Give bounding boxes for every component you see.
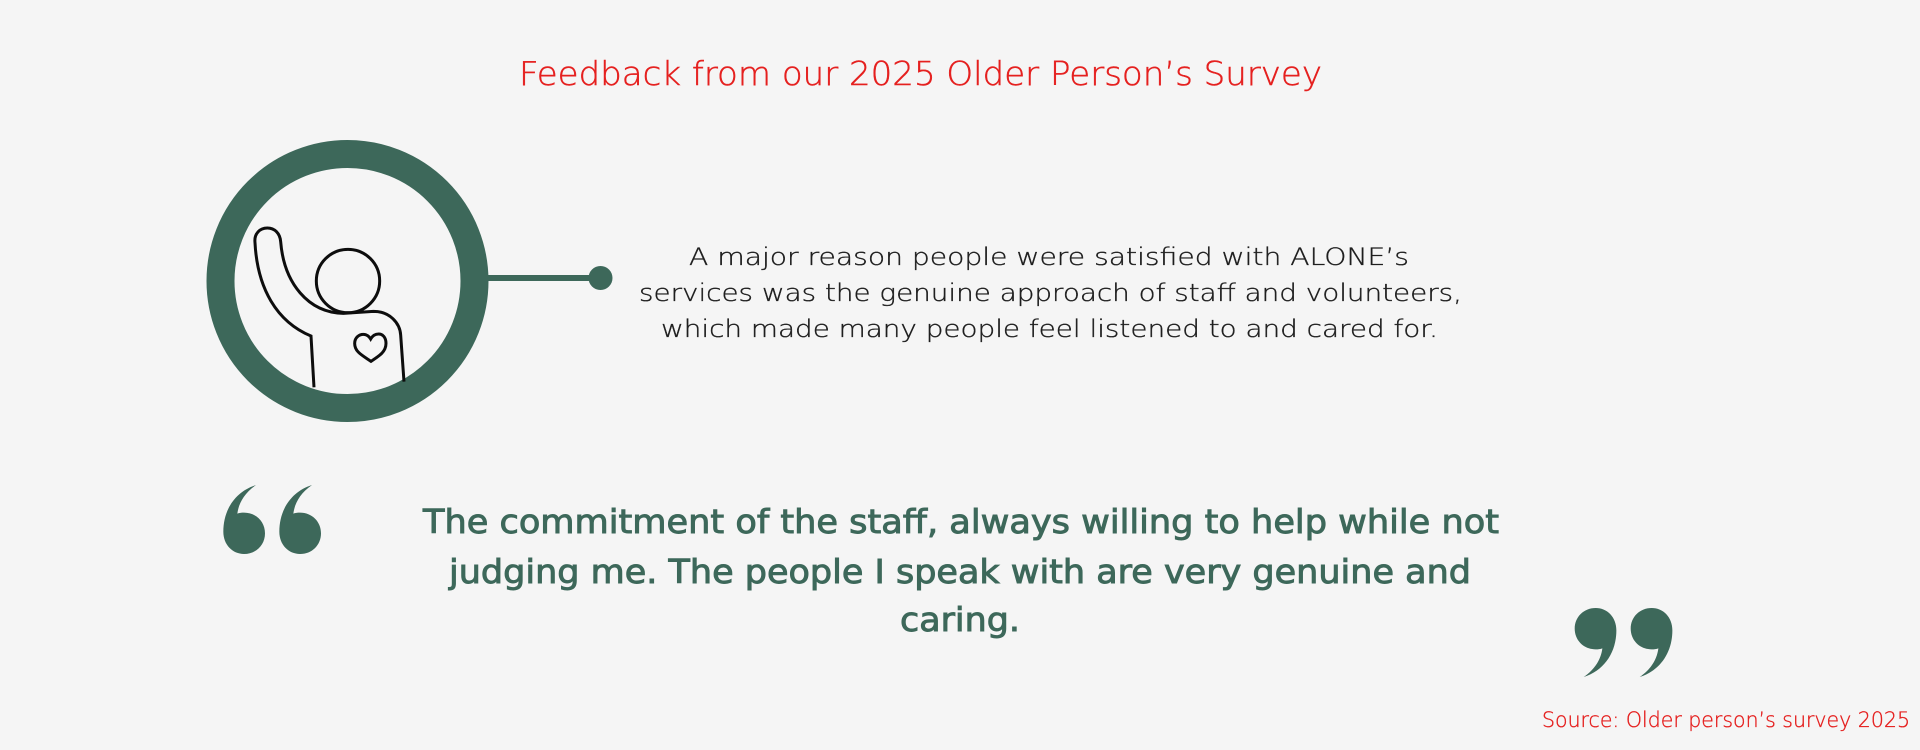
- summary text block: [639, 243, 1462, 343]
- summary text block: services was the genuine approach of staff and volunteers,: [639, 279, 1462, 307]
- connector line with dot: [486, 266, 612, 290]
- title: Feedback from our 2025 Older Person’s Survey: [519, 54, 1322, 93]
- quote text: [422, 503, 1499, 639]
- source note: Source: Older person’s survey 2025: [1542, 708, 1910, 732]
- icon: person raising hand with heart in ring: [220, 154, 474, 408]
- quote text: caring.: [900, 601, 1020, 639]
- icon: opening quotation mark: [223, 485, 321, 554]
- summary text block: A major reason people were satisfied with ALONE’s: [689, 243, 1409, 271]
- icon: closing quotation mark: [1575, 608, 1672, 677]
- summary text block: which made many people feel listened to and cared for.: [661, 315, 1438, 343]
- quote text: The commitment of the staff, always willing to help while not: [422, 503, 1499, 541]
- quote text: judging me. The people I speak with are very genuine and: [448, 553, 1471, 591]
